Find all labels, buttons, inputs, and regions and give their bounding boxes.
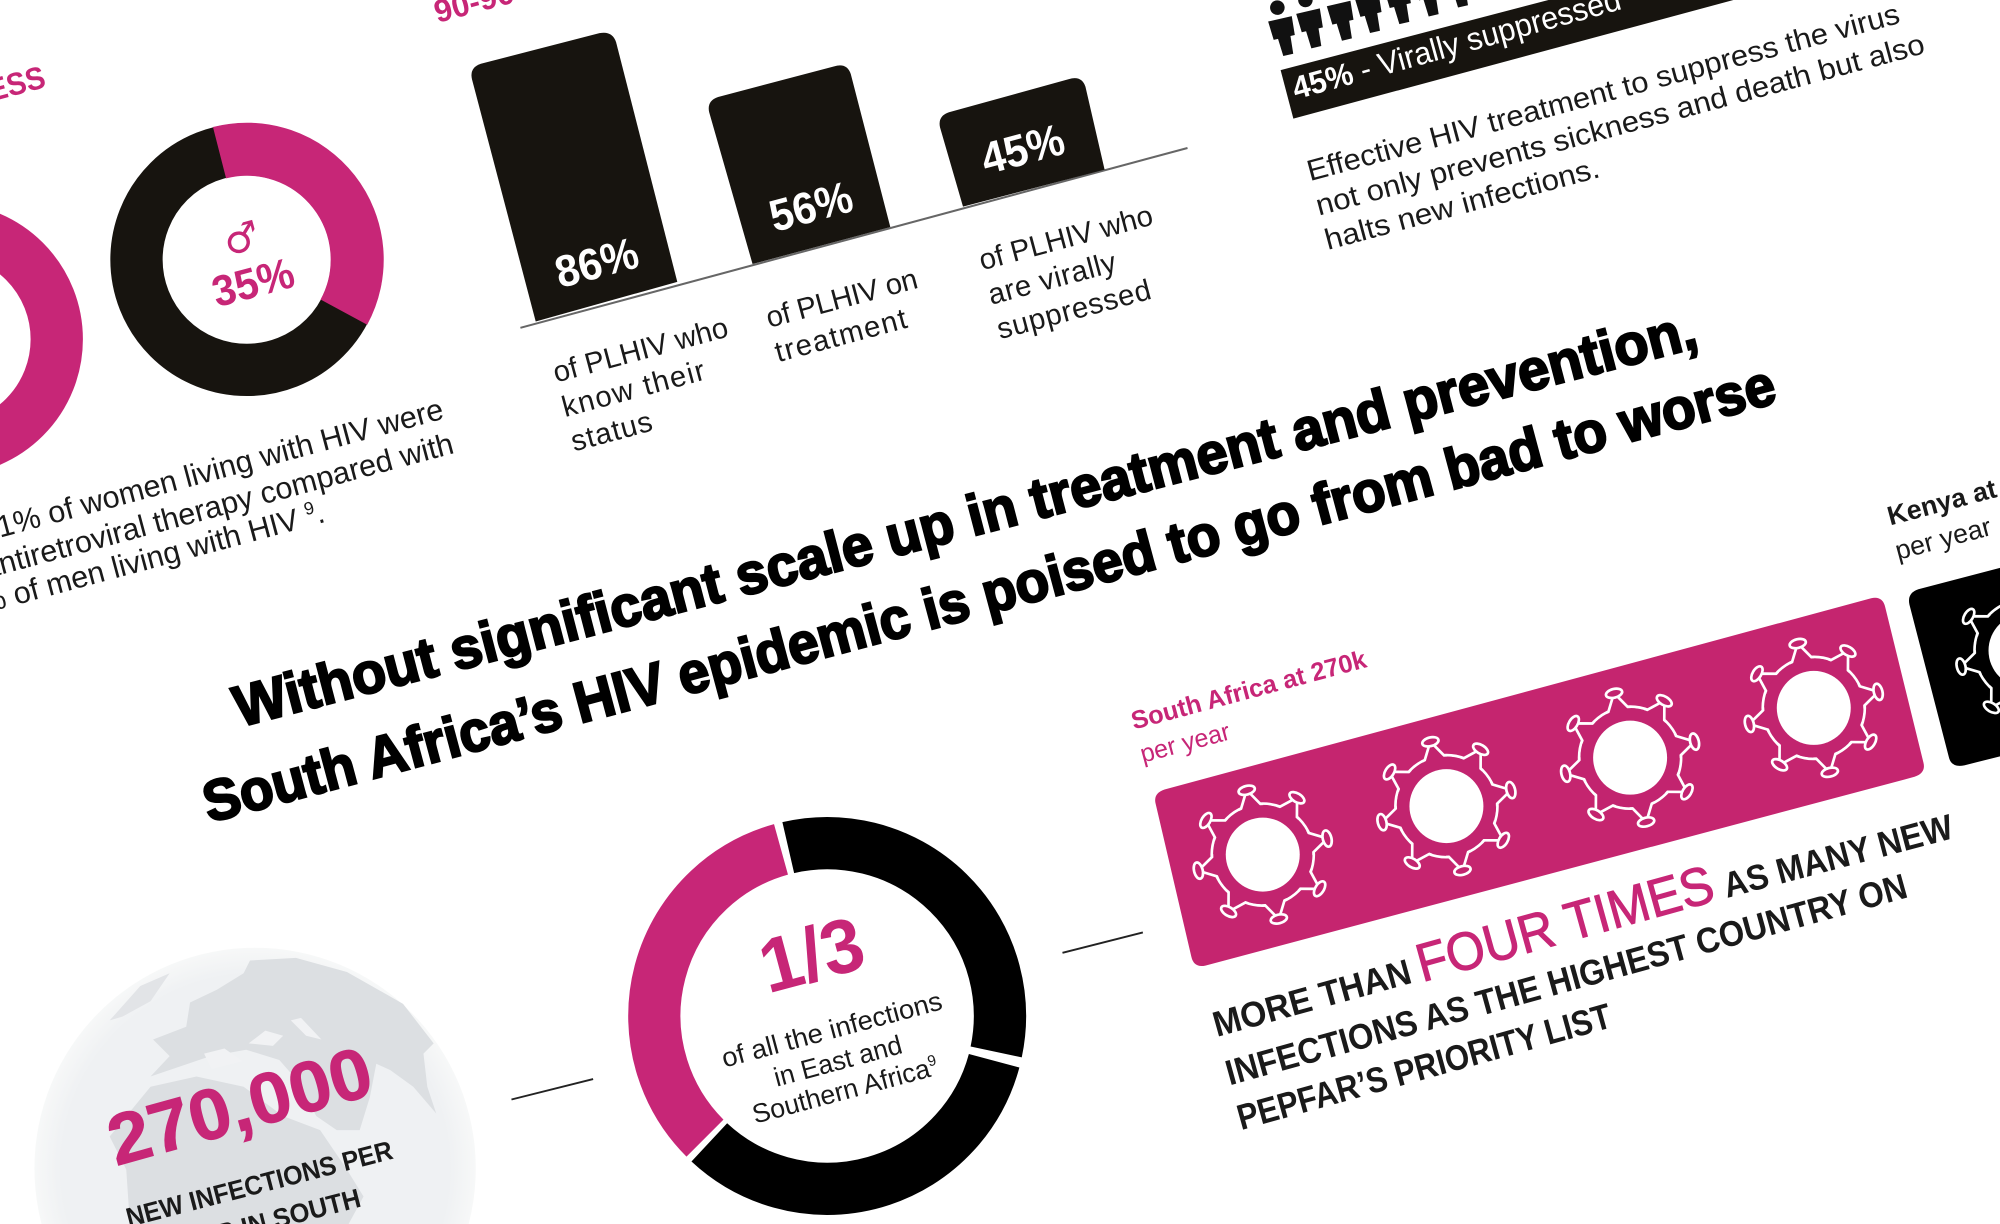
band: 45% virally suppressed — [1281, 0, 1733, 119]
value: 56%: 56% — [764, 173, 858, 242]
text: of all the infections: 9 — [926, 1052, 938, 1070]
value: 86%: 86% — [550, 229, 644, 298]
label: Kenya — [1884, 473, 2000, 566]
caption: virally suppressed — [975, 199, 1156, 346]
caption: virally suppressed: are virally — [984, 246, 1120, 312]
text: effective treatment: not only prevents sickness and death but also — [1312, 28, 1928, 222]
heading: main statement: South Africa’s HIV epidemic is poised to go from bad to worse — [196, 353, 1782, 835]
text: of all the infections — [718, 986, 945, 1130]
chart: 90-90-90 bars — [430, 0, 1187, 458]
label: South Africa at 270k: per year — [1137, 718, 1234, 769]
value: 270,000: 270,000 — [99, 1032, 381, 1181]
caption: virally suppressed: suppressed — [993, 273, 1155, 346]
text: four times as many: PEPFAR’S PRIORITY LIST — [1233, 996, 1616, 1138]
ring: pink segment — [654, 849, 781, 1138]
caption: on treatment: treatment — [771, 302, 910, 369]
caption: on treatment — [762, 262, 921, 369]
panel: virally suppressed people — [1264, 0, 1928, 257]
icon: virus — [1955, 600, 2000, 715]
caption: on treatment: of PLHIV on — [762, 262, 921, 335]
label: Kenya: Kenya at — [1884, 473, 2000, 531]
bar: virally suppressed — [940, 78, 1105, 207]
caption: virally suppressed: of PLHIV who — [975, 199, 1156, 277]
text: treatment comparison: 9 — [302, 497, 316, 519]
icon: virus 4 — [1742, 637, 1885, 779]
text: of all the infections: Southern Africa — [749, 1053, 933, 1130]
bar: on treatment — [709, 65, 890, 264]
connector line — [1062, 932, 1143, 953]
caption: know status — [549, 311, 732, 458]
panel: South Africa viruses — [1155, 598, 1924, 966]
text: of all the infections: in East and — [771, 1030, 905, 1093]
label: South Africa at 270k: South Africa at 270k — [1128, 645, 1370, 735]
text: effective treatment — [1303, 0, 1928, 257]
panel: treatment access by sex — [0, 59, 457, 630]
caption: know status: of PLHIV who — [549, 311, 732, 389]
panel: globe with 270,000 — [34, 948, 476, 1224]
bar: know status — [471, 33, 677, 321]
icon row: people — [1264, 0, 1475, 58]
heading: main statement: Without significant scale up in treatment and prevention, — [227, 297, 1703, 740]
text: effective treatment: Effective HIV treatment to suppress the virus — [1303, 0, 1903, 188]
text: of all the infections: of all the infections — [718, 986, 945, 1073]
connector line — [511, 1079, 593, 1100]
text: effective treatment: halts new infections. — [1321, 152, 1603, 257]
icon: virus 1 — [1191, 783, 1334, 926]
label: 35%: 35% — [207, 249, 300, 317]
caption: know status: know their — [558, 354, 709, 424]
donut: women on treatment — [0, 229, 57, 450]
text: four times as many: AS MANY NEW — [1719, 807, 1957, 906]
text: four times as many: FOUR TIMES — [1410, 855, 1720, 994]
caption: know status: status — [567, 405, 656, 458]
value: 1/3: 1/3 — [750, 901, 873, 1010]
axis line — [520, 148, 1188, 328]
donut: men on treatment 35% — [136, 149, 357, 370]
text: treatment comparison: . — [311, 496, 328, 531]
label: Kenya: per year — [1892, 511, 1994, 566]
donut: one third of infections — [654, 843, 1000, 1189]
icon: virus 3 — [1559, 686, 1701, 829]
ring: black segment bottom — [709, 1061, 994, 1189]
icon: male symbol: ♂ — [218, 212, 265, 266]
value: 45%: 45% — [976, 115, 1070, 184]
icon: virus 2 — [1375, 735, 1518, 877]
globe — [34, 948, 476, 1224]
text: four times as many: INFECTIONS AS THE HIGHEST COUNTRY ON — [1221, 866, 1911, 1093]
panel: Kenya virus — [1909, 564, 2000, 766]
text: four times as many: MORE THAN — [1208, 952, 1416, 1045]
ring: black segment upper right — [788, 843, 1000, 1052]
